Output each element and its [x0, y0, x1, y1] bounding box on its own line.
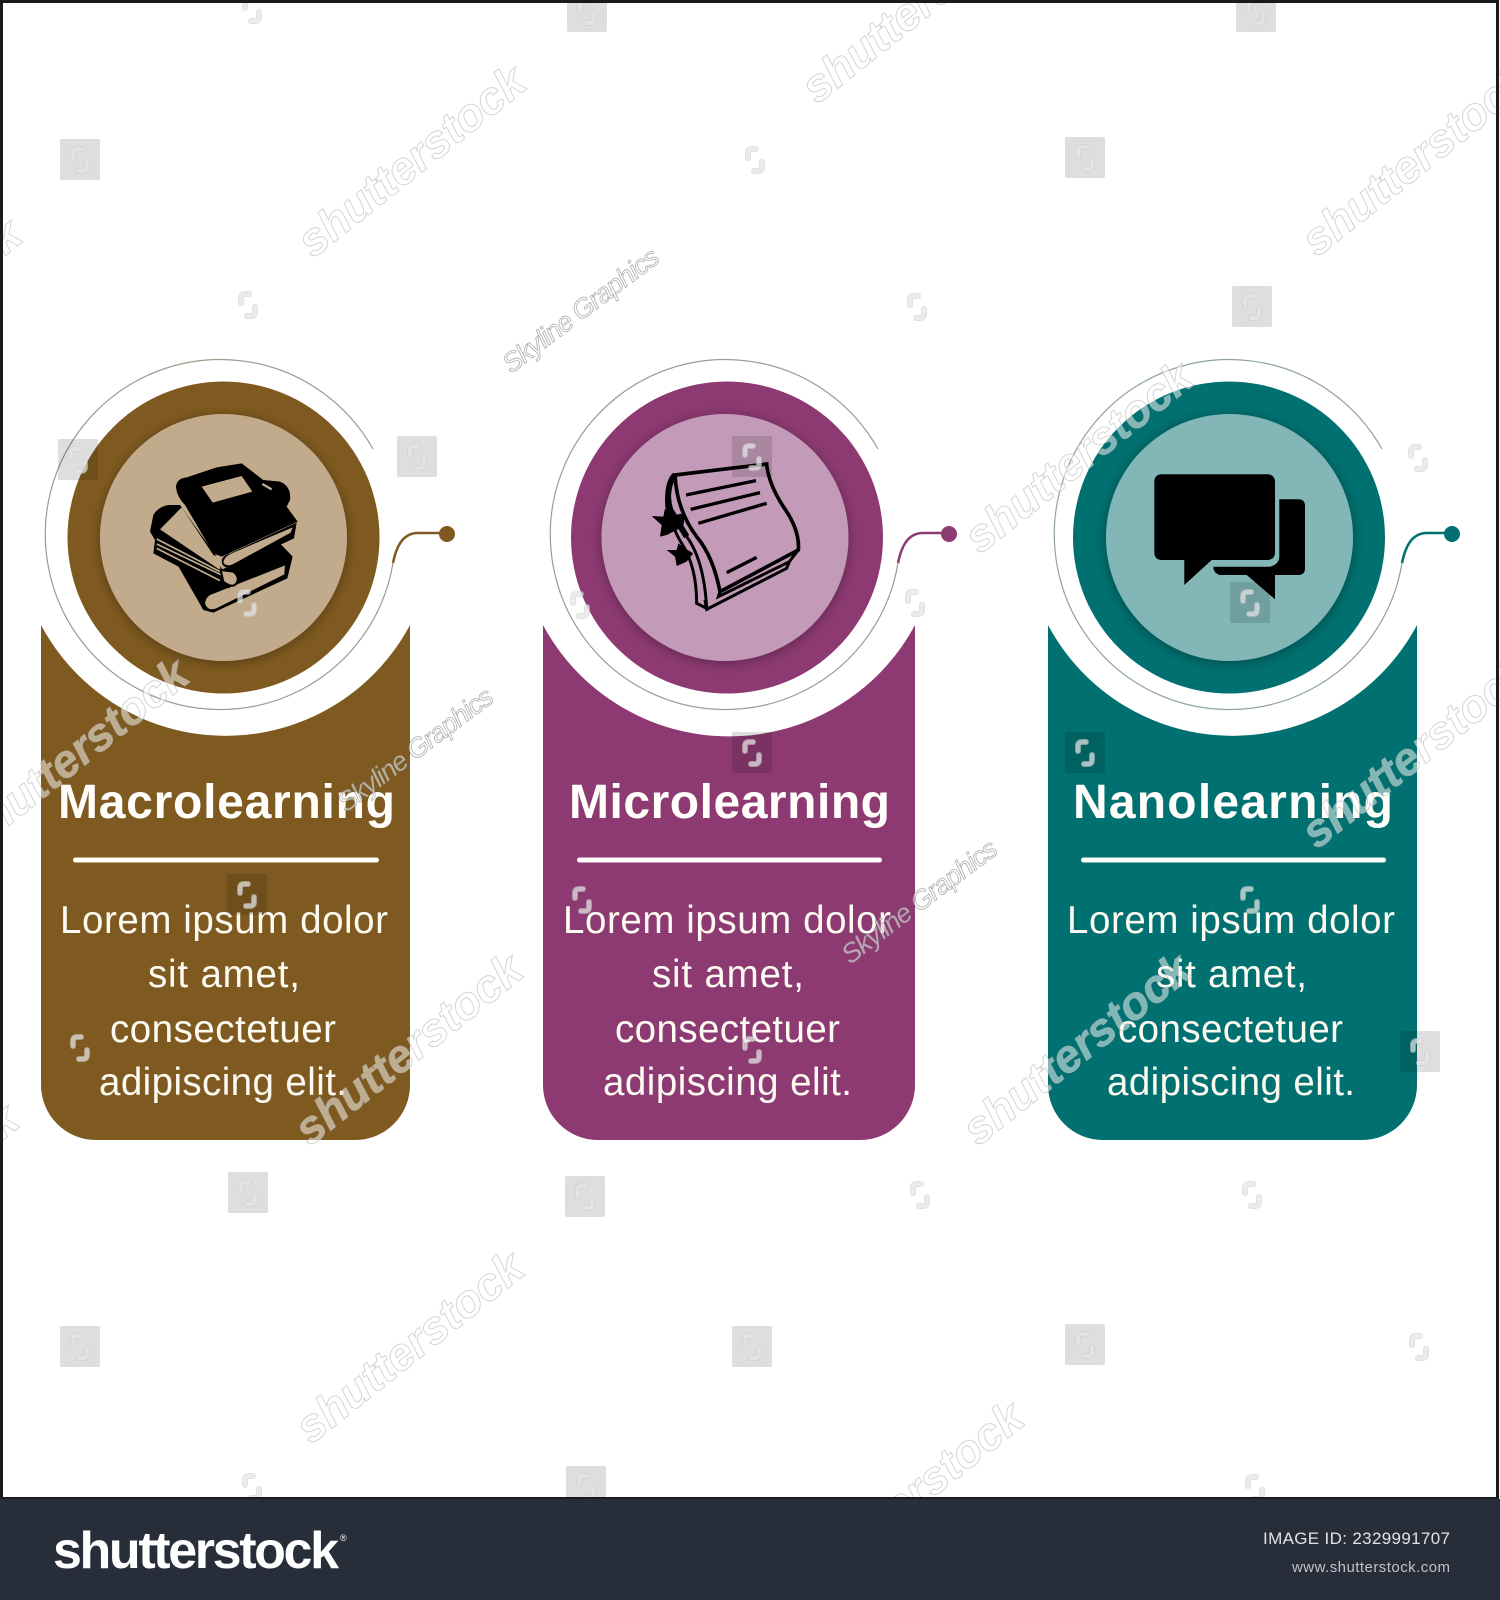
- panel: microlearning: [543, 360, 957, 1140]
- inner circle: [602, 414, 848, 661]
- outer circle: [571, 382, 883, 694]
- stock watermarks overlay: Skyline Graphics: [332, 681, 499, 818]
- body text: [60, 899, 388, 1104]
- body text: Lorem ipsum dolor: [563, 899, 891, 942]
- icon: speech bubbles: [1154, 474, 1305, 599]
- thin ring: [1054, 360, 1402, 710]
- panel: nanolearning: [1048, 360, 1460, 1140]
- body text: Lorem ipsum dolor: [1067, 899, 1395, 942]
- body text: Lorem ipsum dolor: [60, 899, 388, 942]
- heading: macrolearning: Macrolearning: [58, 776, 395, 829]
- stock watermarks overlay: shutterstock: [954, 349, 1204, 563]
- icon: stack of books: [150, 463, 298, 613]
- body text: [1067, 899, 1395, 1104]
- footer logo: shutterstock: [53, 1522, 339, 1580]
- thin ring: [45, 360, 393, 710]
- image id: IMAGE ID: 2329991707: [1263, 1529, 1450, 1548]
- outer circle: [1073, 382, 1385, 694]
- body text: consectetuer: [110, 1008, 336, 1051]
- card: microlearning body: [543, 625, 915, 1140]
- stock watermarks overlay: shutterstock: [285, 1239, 535, 1453]
- divider: [73, 858, 379, 862]
- divider: [577, 858, 882, 862]
- body text: sit amet,: [652, 953, 804, 996]
- body text: adipiscing elit.: [1107, 1061, 1355, 1104]
- card: nanolearning body: [1048, 625, 1417, 1140]
- icon: dog-eared booklet: [652, 464, 798, 609]
- body text: [563, 899, 891, 1104]
- connector with dot: [1402, 526, 1460, 563]
- stock watermarks overlay: Skyline Graphics: [836, 833, 1003, 970]
- stock watermarks overlay: shutterstock: [284, 941, 534, 1155]
- stock watermarks overlay: Skyline Graphics: [497, 242, 665, 379]
- connector with dot: [898, 526, 957, 563]
- body text: sit amet,: [148, 953, 300, 996]
- card: macrolearning body: [41, 625, 410, 1140]
- website: www.shutterstock.com: [1291, 1559, 1450, 1576]
- body text: consectetuer: [615, 1008, 840, 1051]
- stock watermarks overlay: shutterstock: [952, 941, 1202, 1155]
- inner circle: [1106, 414, 1353, 661]
- stock watermarks overlay: shutterstock: [287, 53, 537, 267]
- body text: consectetuer: [1118, 1008, 1343, 1051]
- heading: nanolearning: Nanolearning: [1073, 776, 1393, 829]
- divider: [1081, 858, 1386, 862]
- thin ring: [550, 360, 898, 710]
- body text: adipiscing elit.: [99, 1061, 347, 1104]
- heading: microlearning: Microlearning: [569, 776, 890, 829]
- connector with dot: [393, 526, 455, 563]
- body text: sit amet,: [1156, 953, 1307, 996]
- panel: macrolearning: [41, 360, 455, 1140]
- inner circle: [100, 414, 347, 661]
- body text: adipiscing elit.: [603, 1061, 852, 1104]
- stock watermarks overlay: shutterstock: [785, 1389, 1035, 1600]
- footer bar: [0, 1499, 1500, 1600]
- registered mark: ®: [340, 1533, 347, 1543]
- outer circle: [68, 382, 380, 694]
